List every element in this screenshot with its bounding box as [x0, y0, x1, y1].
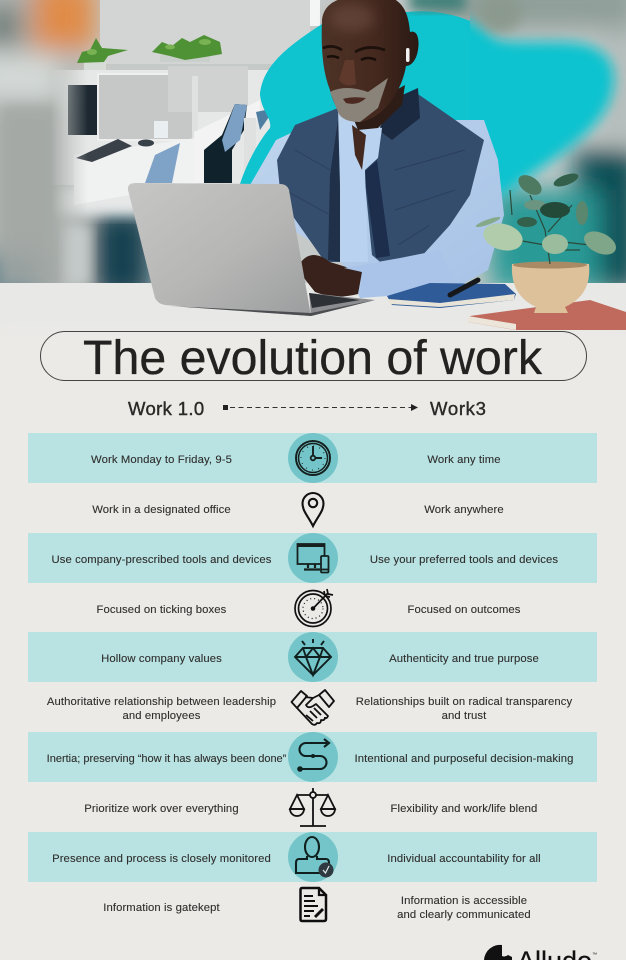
man [248, 0, 504, 298]
ear bud [406, 48, 410, 62]
icon: winding path arrow [288, 732, 338, 782]
shirt front [340, 120, 382, 262]
row: decisions [28, 732, 597, 782]
hand [301, 255, 362, 297]
laptop [128, 183, 375, 316]
white pillar [310, 0, 320, 26]
title: The evolution of work [83, 331, 542, 385]
row: decisions: Intentional and purposeful decision-making [354, 753, 573, 765]
eyebrows and eyes [323, 46, 385, 52]
label: Work3: Work3 [430, 398, 487, 419]
table top [0, 283, 626, 335]
row: accountability [28, 832, 597, 882]
row: accountability: Presence and process is closely monitored [52, 853, 271, 865]
row: focus: Focused on outcomes [407, 604, 521, 616]
row: hours: Work Monday to Friday, 9-5 [91, 454, 232, 466]
beard [330, 78, 388, 122]
cuff [344, 250, 452, 298]
background [0, 0, 626, 310]
row: information: Information is gatekept [103, 902, 220, 914]
row: hours: Work any time [427, 454, 501, 466]
label: Work 1.0: Work 1.0 [128, 398, 204, 419]
title pill [40, 331, 587, 381]
logo: Alludo [484, 944, 597, 960]
icon: map pin [301, 492, 325, 528]
row: information: and clearly communicated [397, 909, 531, 921]
arrow: Work 1.0 to Work3 [223, 404, 418, 411]
icon: balance scales [288, 788, 336, 827]
row: priorities: Flexibility and work/life blend [391, 803, 537, 815]
row: location [92, 492, 504, 528]
row: hours [28, 433, 597, 483]
row: decisions: Inertia; preserving “how it has always been done” [47, 753, 286, 765]
hero photo: man working at a laptop [0, 0, 626, 330]
red book [468, 300, 626, 330]
row: accountability: Individual accountability for all [387, 853, 541, 865]
neck [352, 85, 405, 130]
row: focus [97, 588, 521, 628]
row: tools: Use your preferred tools and devices [370, 554, 558, 566]
shirt [248, 110, 504, 298]
row: values [28, 632, 597, 682]
icon: computer and phone [288, 533, 338, 583]
row: relationships [46, 689, 572, 726]
logo mark [484, 944, 512, 960]
nose highlight [339, 60, 356, 85]
desk plants [77, 35, 222, 70]
notebook and pen [387, 280, 516, 308]
row: priorities: Prioritize work over everything [84, 803, 239, 815]
row: focus: Focused on ticking boxes [97, 604, 226, 616]
potted plant [475, 171, 620, 313]
icon: handshake [290, 689, 335, 726]
row: information: Information is accessible [401, 894, 527, 906]
teal blob [240, 0, 614, 230]
vest [277, 108, 342, 262]
row: relationships: Relationships built on radical transparency [356, 696, 572, 708]
icon: document [299, 886, 328, 922]
icon: target [294, 588, 334, 628]
icon: clock [288, 433, 338, 483]
row: values: Authenticity and true purpose [389, 653, 539, 665]
icon: diamond [288, 632, 338, 682]
office cubicles [50, 0, 310, 215]
row: values: Hollow company values [101, 653, 222, 665]
row: information [103, 886, 531, 922]
icon: person with check [288, 832, 338, 882]
row: relationships: Authoritative relationship between leadership [47, 696, 276, 708]
row: location: Work anywhere [424, 504, 504, 516]
row: relationships: and employees [123, 710, 200, 722]
row: relationships: and trust [442, 710, 486, 722]
row: location: Work in a designated office [92, 504, 231, 516]
head [322, 0, 419, 122]
row: priorities [84, 788, 537, 827]
row: tools: Use company-prescribed tools and devices [51, 554, 272, 566]
row: tools [28, 533, 597, 583]
